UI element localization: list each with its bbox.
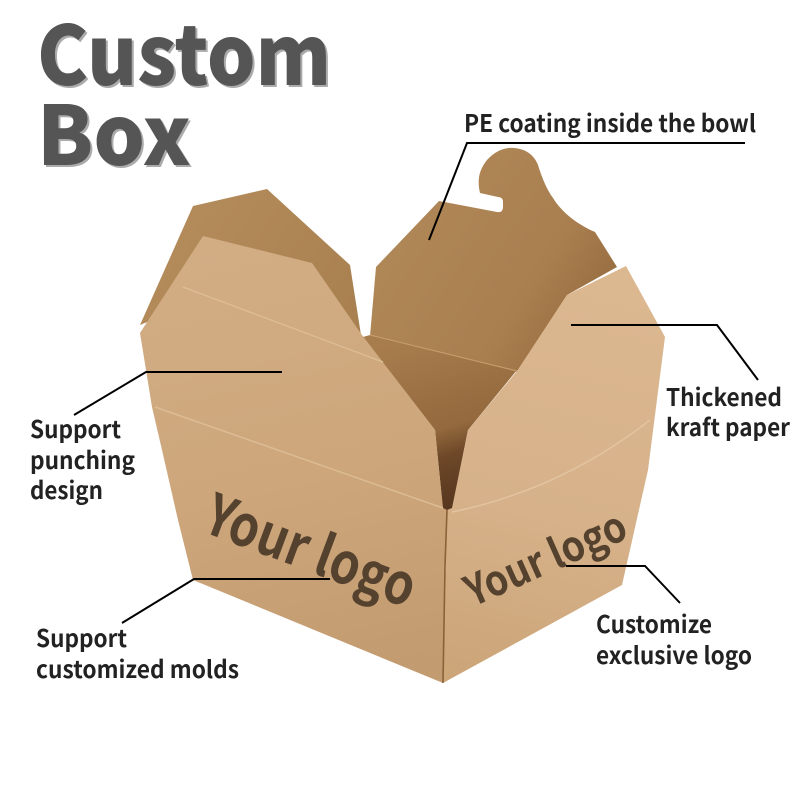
callout: customized molds	[36, 579, 330, 685]
printed logo left: Your logo	[194, 470, 430, 624]
callout: exclusive logo	[566, 566, 752, 671]
callout: PE coating	[429, 104, 756, 240]
callout: punching design: punching	[30, 441, 135, 476]
callout: customized molds: Support	[36, 619, 127, 654]
callout: customized molds: customized molds	[36, 650, 239, 685]
callout: punching design: design	[30, 471, 103, 506]
callout: punching design	[30, 372, 282, 506]
centre corner seam	[443, 510, 447, 683]
title: Box	[37, 70, 191, 189]
inner fold crease	[370, 335, 517, 371]
callout: PE coating: PE coating inside the bowl	[464, 104, 756, 139]
title: Box	[39, 72, 193, 191]
callout: exclusive logo: Customize	[596, 605, 712, 640]
back inner flap with hook tab	[370, 148, 617, 372]
front left panel	[140, 236, 447, 683]
right panel	[443, 266, 665, 683]
callout: exclusive logo: exclusive logo	[596, 636, 752, 671]
callout: thickened kraft paper	[571, 325, 790, 443]
callout: thickened kraft paper: Thickened	[666, 378, 782, 413]
left panel creases	[183, 287, 383, 362]
callout: punching design: Support	[30, 410, 121, 445]
back left flap	[140, 189, 361, 335]
kraft box illustration	[140, 148, 665, 683]
callout: thickened kraft paper: kraft paper	[666, 408, 790, 443]
right panel crease	[452, 420, 650, 512]
inner box wall and slit	[363, 335, 517, 510]
title	[37, 0, 333, 191]
printed logo right: Your logo	[453, 493, 635, 619]
